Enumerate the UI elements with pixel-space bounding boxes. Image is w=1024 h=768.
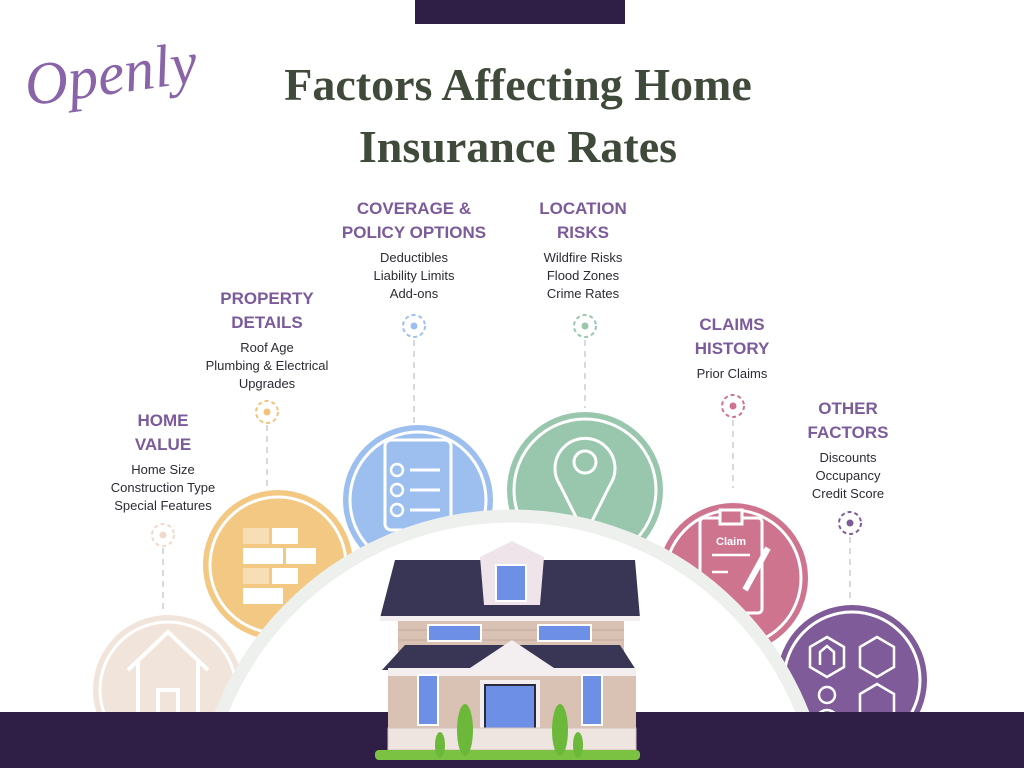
- label: coverage: Deductibles: [380, 250, 448, 265]
- circle: other factors: [777, 605, 927, 755]
- label: other: [808, 399, 888, 501]
- label: property details: PROPERTY: [220, 289, 314, 308]
- label: coverage: Add-ons: [390, 286, 438, 301]
- circle: home value: [93, 615, 243, 765]
- label: other: OTHER: [818, 399, 878, 418]
- label: location: [539, 199, 627, 301]
- label: claims: Prior Claims: [697, 366, 767, 381]
- dashed connectors: [163, 340, 850, 612]
- label: location: RISKS: [557, 223, 609, 242]
- dots: [152, 315, 861, 546]
- bottom band: [0, 712, 1024, 768]
- label: coverage: Liability Limits: [374, 268, 454, 283]
- label: location: LOCATION: [539, 199, 627, 218]
- label: home value: HOME: [138, 411, 188, 430]
- circle: claims: Claim: [716, 536, 746, 548]
- label: property details: [206, 289, 328, 391]
- label: coverage: COVERAGE &: [357, 199, 471, 218]
- label: home value: Construction Type: [111, 480, 215, 495]
- label: property details: Roof Age: [240, 340, 294, 355]
- label: property details: Plumbing & Electrical: [206, 358, 328, 373]
- label: claims: HISTORY: [695, 339, 769, 358]
- label: other: Credit Score: [812, 486, 884, 501]
- label: home value: Home Size: [131, 462, 195, 477]
- label: property details: DETAILS: [231, 313, 303, 332]
- label: coverage: POLICY OPTIONS: [342, 223, 486, 242]
- label: home value: VALUE: [135, 435, 191, 454]
- label: home value: Special Features: [114, 498, 212, 513]
- circle: coverage: [343, 425, 493, 575]
- label: claims: [695, 315, 769, 381]
- title: Insurance Rates: [359, 121, 677, 172]
- logo: Openly: [20, 29, 201, 119]
- label: location: Flood Zones: [547, 268, 619, 283]
- label: coverage: [342, 199, 486, 301]
- label: other: Occupancy: [815, 468, 881, 483]
- arc: [199, 516, 825, 768]
- label: location: Crime Rates: [547, 286, 619, 301]
- label: home value: [111, 411, 215, 513]
- title: Factors Affecting Home: [284, 59, 752, 110]
- circle: claims: [658, 503, 808, 653]
- label: location: Wildfire Risks: [544, 250, 622, 265]
- circle: property details: [203, 490, 353, 640]
- label: property details: Upgrades: [239, 376, 295, 391]
- label: other: Discounts: [819, 450, 877, 465]
- label: other: FACTORS: [808, 423, 888, 442]
- label: claims: CLAIMS: [699, 315, 765, 334]
- circle: location: [507, 412, 663, 568]
- top bar: [415, 0, 625, 24]
- title: [284, 59, 752, 172]
